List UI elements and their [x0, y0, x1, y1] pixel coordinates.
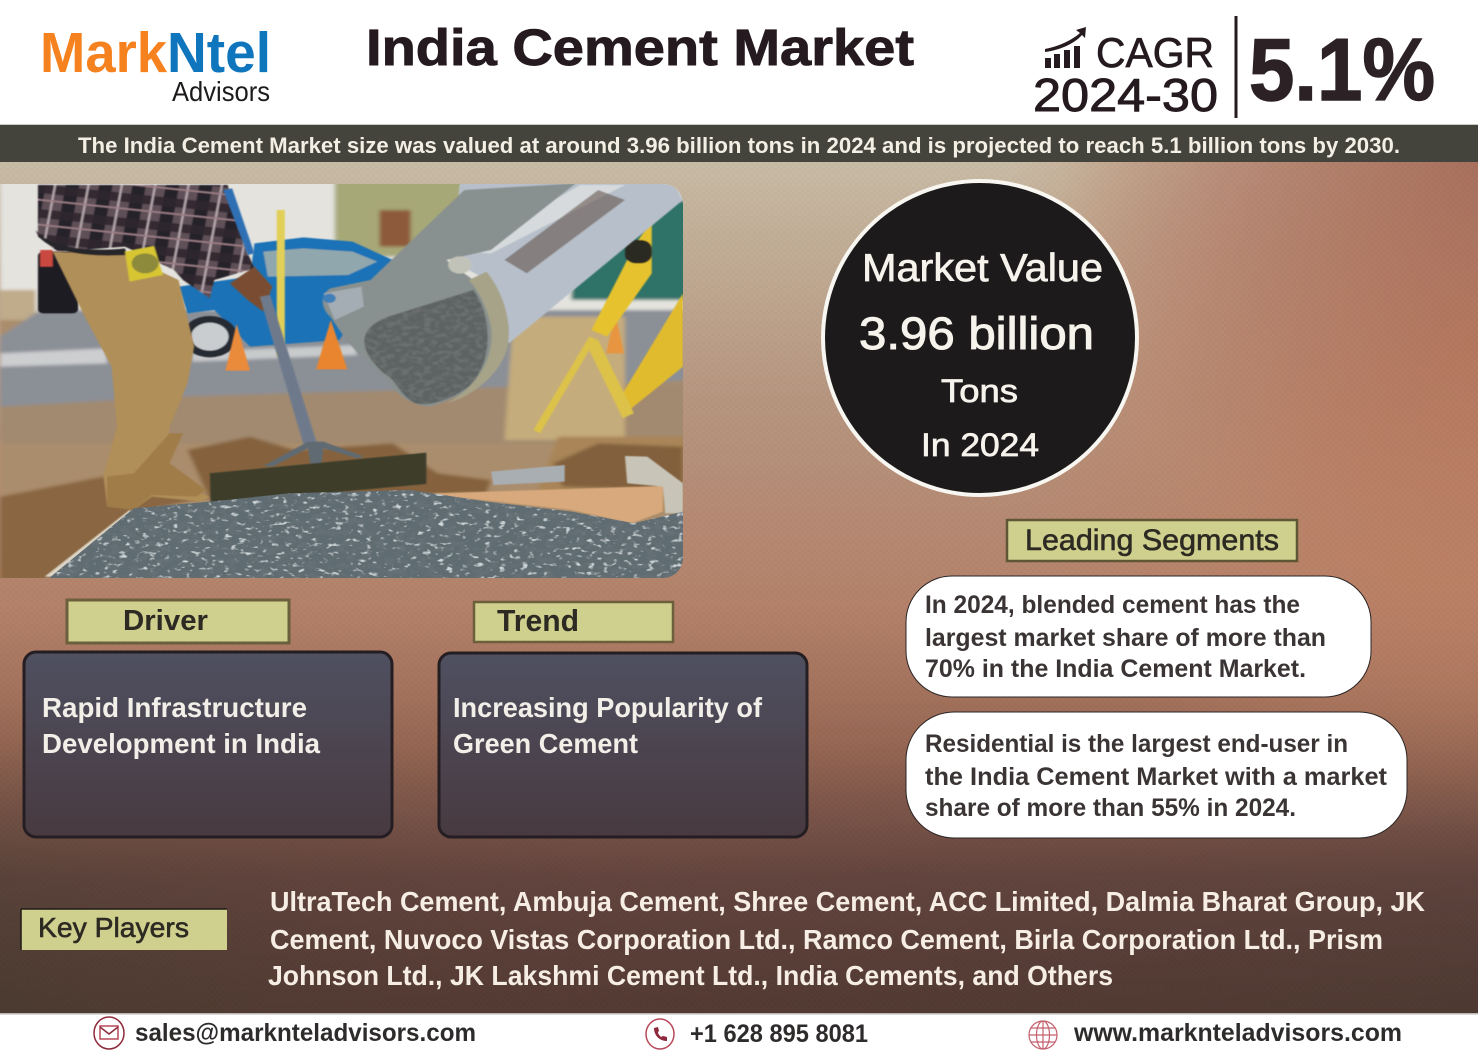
text: key players list: Cement, Nuvoco Vistas Corporation Ltd., Ramco Cement, Birla Corporation Ltd., Prism	[270, 924, 1383, 955]
callout: blended cement	[906, 576, 1371, 697]
callout: residential end-user: Residential is the largest end-user in	[925, 730, 1348, 758]
panel: driver	[24, 652, 392, 837]
panel: trend: Increasing Popularity of	[453, 692, 763, 723]
title: India Cement Market	[366, 19, 914, 76]
text: key players list	[268, 886, 1425, 991]
photo: worker spreading poured concrete	[0, 180, 687, 580]
icon: globe	[1029, 1021, 1057, 1049]
worker	[36, 185, 272, 510]
icon: phone	[646, 1019, 674, 1049]
wet concrete	[47, 490, 683, 580]
chute	[323, 183, 683, 407]
text: key players list: Johnson Ltd., JK Lakshmi Cement Ltd., India Cements, and Others	[268, 960, 1113, 991]
heading: key players: Key Players	[38, 912, 189, 943]
rake handle	[210, 188, 426, 503]
contact: website: www.marknteladvisors.com	[1073, 1019, 1402, 1047]
heading: key players	[21, 909, 227, 950]
heading: leading segments	[1007, 520, 1297, 561]
text: key players list: UltraTech Cement, Ambuja Cement, Shree Cement, ACC Limited, Dalmia Bharat Group, JK	[270, 886, 1425, 917]
icon: email	[94, 1017, 124, 1049]
panel: trend	[439, 653, 807, 837]
CAGR block	[1033, 16, 1435, 121]
contact: phone: +1 628 895 8081	[690, 1020, 868, 1048]
CAGR value: 5.1%	[1249, 20, 1435, 119]
heading: driver	[67, 600, 289, 643]
callout: residential end-user	[906, 712, 1407, 838]
contact: email: sales@marknteladvisors.com	[135, 1019, 476, 1047]
logo: MarkNtel Advisors: Mark	[40, 21, 167, 85]
logo: MarkNtel Advisors	[40, 21, 271, 107]
heading: driver: Driver	[123, 605, 208, 637]
panel: driver: Development in India	[42, 728, 320, 759]
callout: blended cement: In 2024, blended cement has the	[925, 591, 1300, 619]
callout: blended cement: 70% in the India Cement Market.	[925, 655, 1306, 683]
callout: blended cement: largest market share of more than	[925, 624, 1326, 652]
summary bar: The India Cement Market size was valued at around 3.96 billion tons in 2024 and is projected to reach 5.1 billion tons by 2030.	[78, 133, 1400, 158]
callout: residential end-user: the India Cement Market with a market	[925, 763, 1388, 791]
summary bar	[0, 124, 1478, 162]
market value circle	[823, 181, 1137, 495]
heading: leading segments: Leading Segments	[1025, 524, 1279, 557]
divider	[1234, 16, 1238, 118]
yellow machinery	[533, 220, 683, 433]
logo: MarkNtel Advisors: Advisors	[172, 76, 270, 107]
market value number: 3.96 billion	[859, 308, 1094, 359]
form board	[45, 456, 683, 577]
CAGR label: CAGR	[1096, 29, 1214, 76]
year: In 2024	[921, 427, 1039, 463]
callout: residential end-user: share of more than 55% in 2024.	[925, 794, 1296, 822]
panel: driver: Rapid Infrastructure	[42, 692, 307, 723]
CAGR period: 2024-30	[1033, 69, 1218, 121]
heading: trend	[474, 602, 673, 642]
photo backdrop	[0, 180, 687, 580]
unit: Tons	[941, 373, 1018, 409]
panel: trend: Green Cement	[453, 728, 638, 759]
heading: trend: Trend	[497, 603, 579, 638]
icon: rising bar chart	[1045, 27, 1086, 68]
market value heading: Market Value	[862, 247, 1103, 290]
parked blue car	[38, 237, 393, 357]
logo: MarkNtel Advisors: Ntel	[167, 21, 271, 85]
traffic cones	[225, 210, 624, 371]
footer	[0, 1013, 1478, 1053]
